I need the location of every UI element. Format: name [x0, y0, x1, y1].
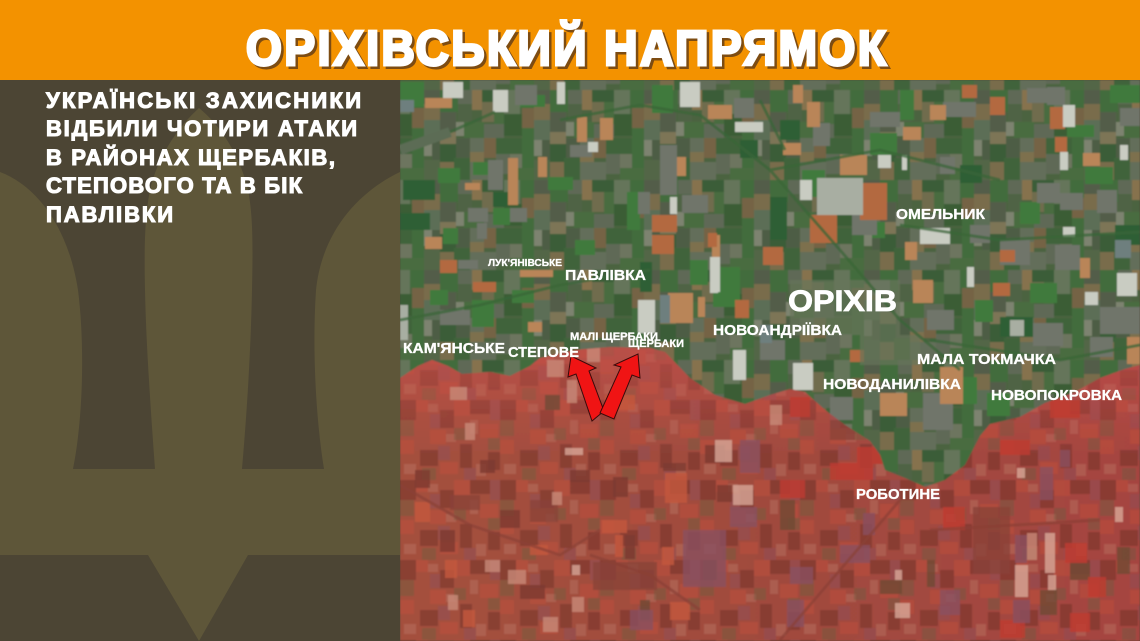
forest belts and roads — [400, 100, 1140, 370]
map labels: МАЛІ ЩЕРБАКИ — [570, 331, 658, 343]
map labels: КАМ'ЯНСЬКЕ — [403, 340, 505, 357]
map labels: ОМЕЛЬНИК — [896, 206, 986, 223]
arrow: attack toward Stepove — [568, 356, 604, 421]
map labels: НОВОАНДРІЇВКА — [713, 322, 842, 339]
summary text: ВІДБИЛИ ЧОТИРИ АТАКИ — [46, 116, 357, 141]
map labels: НОВОДАНИЛІВКА — [823, 376, 961, 393]
map labels: ЛУК'ЯНІВСЬКЕ — [488, 258, 562, 269]
occupied territory overlay — [400, 340, 1140, 641]
map labels: СТЕПОВЕ — [508, 344, 579, 361]
satellite map — [400, 80, 1140, 641]
summary text: ПАВЛІВКИ — [46, 202, 173, 227]
left panel background — [0, 80, 400, 641]
header bar — [0, 0, 1140, 80]
summary text: СТЕПОВОГО ТА В БІК — [46, 173, 303, 198]
title: ОРІХІВСЬКИЙ НАПРЯМОК — [246, 20, 886, 76]
map labels: МАЛА ТОКМАЧКА — [917, 351, 1056, 368]
summary text — [46, 88, 361, 227]
arrow: attack toward Shcherbaky — [600, 354, 640, 419]
map labels: ПАВЛІВКА — [565, 267, 646, 284]
summary text: В РАЙОНАХ ЩЕРБАКІВ, — [46, 145, 335, 170]
summary text: УКРАЇНСЬКІ ЗАХИСНИКИ — [46, 88, 361, 113]
map labels: ЩЕРБАКИ — [628, 338, 684, 350]
map labels: РОБОТИНЕ — [856, 486, 940, 503]
title: ОРІХІВСЬКИЙ НАПРЯМОК — [248, 22, 889, 79]
icon: trident watermark — [0, 108, 400, 641]
map labels: НОВОПОКРОВКА — [991, 387, 1122, 404]
map labels: ОРІХІВ — [788, 285, 897, 318]
map labels — [403, 206, 1122, 503]
